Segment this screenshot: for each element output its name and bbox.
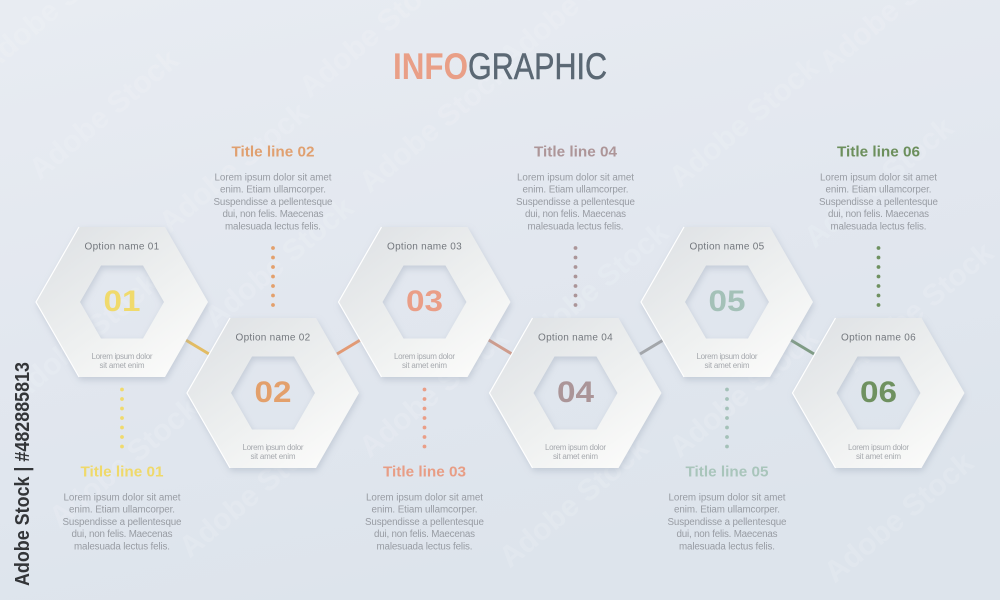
text block: title line 02: malesuada lectus felis. xyxy=(225,221,321,232)
panel: option 06: 06 xyxy=(860,376,897,409)
title: INFO xyxy=(393,46,468,87)
panel: option 04: Lorem ipsum dolor xyxy=(545,443,606,452)
panel: option 03 xyxy=(338,227,510,377)
text block: title line 04: dui, non felis. Maecenas xyxy=(525,209,626,220)
panel: option 03: Lorem ipsum dolor xyxy=(394,352,455,361)
panel: option 03: 03 xyxy=(406,285,443,318)
panel: option 01: 01 xyxy=(104,285,140,318)
panel: option 05: sit amet enim xyxy=(704,361,750,370)
panel: option 06 xyxy=(792,318,964,468)
watermarks: Adobe Stock xyxy=(173,421,335,564)
text block: title line 05: malesuada lectus felis. xyxy=(679,541,775,552)
watermarks: Adobe Stock xyxy=(353,321,515,464)
panel: option 02: Option name 02 xyxy=(236,332,311,344)
text block: title line 06 xyxy=(819,144,939,232)
panel: option 06: Option name 06 xyxy=(841,332,916,344)
panel: option 05: 05 xyxy=(708,285,746,318)
watermarks: Adobe Stock xyxy=(353,56,515,199)
watermarks: Adobe Stock xyxy=(663,51,825,194)
panel: option 01 xyxy=(36,227,208,377)
dotted line 04 xyxy=(574,246,577,307)
side credit text: Adobe Stock | #482885813 xyxy=(12,362,34,586)
panel: option 04: 04 xyxy=(557,376,594,409)
text block: title line 03: dui, non felis. Maecenas xyxy=(374,529,475,540)
text block: title line 05: Suspendisse a pellentesque xyxy=(668,517,787,528)
panel: option 02: sit amet enim xyxy=(250,452,296,461)
dotted line 03 xyxy=(423,388,426,448)
panel: option 05: Option name 05 xyxy=(690,242,765,252)
panel: option 03: sit amet enim xyxy=(402,361,447,370)
text block: title line 04 xyxy=(516,144,636,232)
text block: title line 04: Suspendisse a pellentesque xyxy=(516,197,636,208)
text block: title line 01: dui, non felis. Maecenas xyxy=(72,529,173,540)
text block: title line 04: enim. Etiam ullamcorper. xyxy=(522,185,628,196)
watermarks: Adobe Stock xyxy=(818,446,980,589)
text block: title line 05: Lorem ipsum dolor sit amet xyxy=(668,492,786,504)
text block: title line 05 xyxy=(668,464,787,552)
panel: option 05 xyxy=(641,227,813,377)
text block: title line 05: enim. Etiam ullamcorper. xyxy=(674,505,780,516)
text block: title line 01: Lorem ipsum dolor sit amet xyxy=(64,492,181,504)
text block: title line 05: dui, non felis. Maecenas xyxy=(676,529,778,540)
panel: option 01: sit amet enim xyxy=(100,361,145,370)
panel: option 04: sit amet enim xyxy=(553,452,598,461)
watermarks: Adobe Stock xyxy=(493,431,655,574)
text block: title line 01: Title line 01 xyxy=(80,464,164,480)
text block: title line 03 xyxy=(365,464,485,552)
text block: title line 02: Suspendisse a pellentesque xyxy=(214,197,333,208)
watermarks: Adobe Stock xyxy=(43,391,205,534)
text block: title line 03: Lorem ipsum dolor sit amet xyxy=(366,492,483,504)
text block: title line 06: enim. Etiam ullamcorper. xyxy=(826,185,932,196)
title: GRAPHIC xyxy=(468,46,607,87)
text block: title line 03: malesuada lectus felis. xyxy=(376,541,472,552)
text block: title line 06: malesuada lectus felis. xyxy=(830,221,926,232)
text block: title line 04: Title line 04 xyxy=(534,144,618,160)
watermarks: Adobe Stock xyxy=(3,266,165,409)
dotted line 05 xyxy=(725,388,729,448)
dotted line 01 xyxy=(120,388,124,448)
text block: title line 01: enim. Etiam ullamcorper. xyxy=(69,505,175,516)
title xyxy=(393,46,607,87)
text block: title line 04: Lorem ipsum dolor sit amet xyxy=(517,172,634,184)
panel: option 01: Lorem ipsum dolor xyxy=(92,352,153,361)
panel: option 03: Option name 03 xyxy=(387,242,462,252)
text block: title line 06: Suspendisse a pellentesque xyxy=(819,197,939,208)
text block: title line 03: Title line 03 xyxy=(383,464,466,480)
panel: option 02 xyxy=(187,318,359,468)
text block: title line 03: enim. Etiam ullamcorper. xyxy=(372,505,478,516)
watermarks: Adobe Stock xyxy=(663,321,825,464)
watermarks: Adobe Stock xyxy=(513,216,675,359)
watermarks: Adobe Stock xyxy=(838,236,1000,379)
panel: option 01: Option name 01 xyxy=(84,242,160,252)
panel: option 05: Lorem ipsum dolor xyxy=(696,352,758,361)
dotted line 02 xyxy=(271,246,275,307)
panel: option 06: sit amet enim xyxy=(856,452,901,461)
watermarks: Adobe Stock xyxy=(798,111,960,254)
text block: title line 02 xyxy=(214,144,333,232)
panel: option 06: Lorem ipsum dolor xyxy=(848,443,909,452)
watermarks: Adobe Stock xyxy=(23,43,185,186)
watermarks: Adobe Stock xyxy=(153,96,315,239)
panel: option 02: Lorem ipsum dolor xyxy=(242,443,304,452)
connector lines xyxy=(184,339,814,354)
text block: title line 03: Suspendisse a pellentesque xyxy=(365,517,485,528)
text block: title line 05: Title line 05 xyxy=(686,464,768,480)
text block: title line 06: Title line 06 xyxy=(837,144,920,160)
dotted line 06 xyxy=(877,246,880,307)
text block: title line 01: Suspendisse a pellentesque xyxy=(62,517,182,528)
panel: option 02: 02 xyxy=(254,376,292,409)
text block: title line 06: dui, non felis. Maecenas xyxy=(828,209,929,220)
text block: title line 04: malesuada lectus felis. xyxy=(528,221,624,232)
text block: title line 06: Lorem ipsum dolor sit amet xyxy=(820,172,937,184)
panel: option 04: Option name 04 xyxy=(538,332,613,344)
text block: title line 02: dui, non felis. Maecenas xyxy=(222,209,324,220)
text block: title line 02: Lorem ipsum dolor sit amet xyxy=(214,172,332,184)
text block: title line 01: malesuada lectus felis. xyxy=(74,541,170,552)
watermarks: Adobe Stock xyxy=(198,191,360,334)
text block: title line 02: Title line 02 xyxy=(232,144,314,160)
panel: option 04 xyxy=(490,318,662,468)
text block: title line 02: enim. Etiam ullamcorper. xyxy=(220,185,326,196)
text block: title line 01 xyxy=(62,464,182,552)
